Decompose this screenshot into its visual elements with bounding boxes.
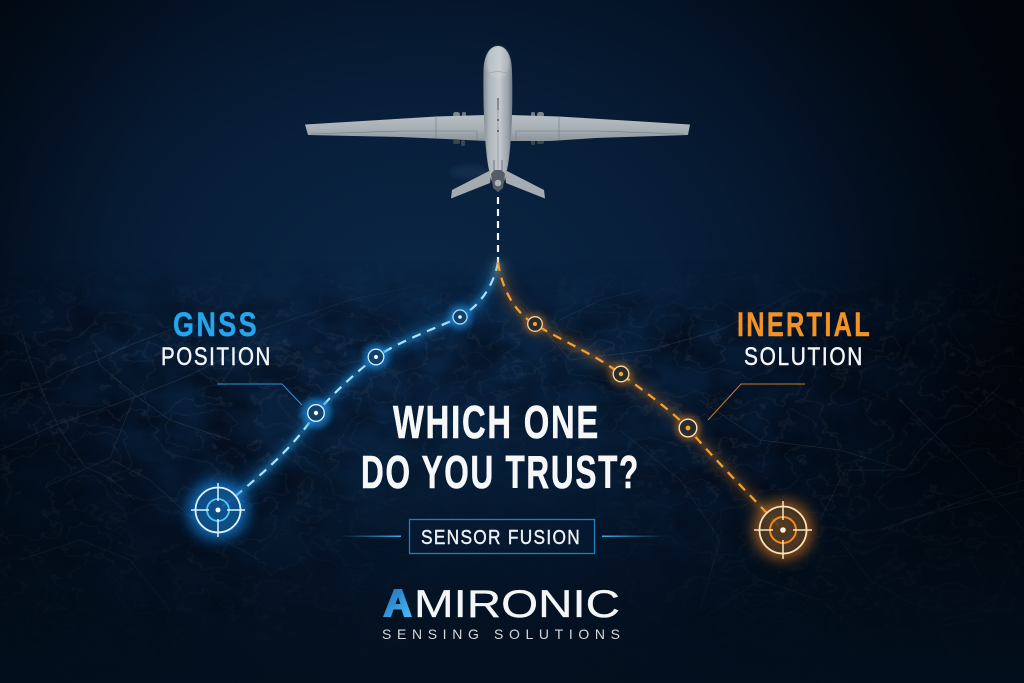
left wing — [305, 115, 486, 141]
title: WHICH ONE — [393, 396, 600, 448]
engine pods — [453, 112, 544, 146]
orange waypoint 2 — [609, 362, 633, 386]
label: SOLUTION: SOLUTION — [744, 343, 864, 371]
fuselage — [483, 46, 512, 192]
logo: Amironic: MIRONIC — [414, 583, 620, 626]
leader line: inertial — [708, 384, 805, 420]
right wing — [510, 115, 690, 141]
orange inertial path — [498, 262, 812, 559]
label: INERTIAL: INERTIAL — [737, 306, 872, 344]
title: DO YOU TRUST? — [361, 446, 640, 498]
spine — [497, 108, 499, 170]
left tail — [451, 171, 491, 198]
label: GNSS: GNSS — [173, 306, 259, 344]
label: POSITION: POSITION — [161, 343, 272, 371]
terrain map texture — [0, 280, 1024, 610]
logo: Amironic — [382, 583, 620, 642]
sensor fusion badge: SENSOR FUSION — [421, 527, 581, 549]
blue waypoint 3 — [301, 398, 331, 428]
sensor fusion badge — [340, 520, 665, 554]
right tail — [505, 171, 545, 198]
leader line: GNSS — [217, 384, 302, 405]
tail shadow glow — [450, 165, 490, 179]
logo: Amironic: SENSING SOLUTIONS — [382, 626, 620, 642]
logo mark A — [383, 589, 412, 617]
orange waypoint 1 — [524, 313, 546, 335]
orange target — [754, 501, 812, 559]
blue GNSS path — [188, 262, 498, 540]
nose highlight — [486, 46, 510, 78]
blue target — [188, 480, 248, 540]
blue waypoint 1 — [448, 305, 472, 329]
rear engine — [491, 170, 505, 192]
blue waypoint 2 — [363, 344, 389, 370]
drone aircraft — [305, 46, 690, 198]
title — [361, 396, 640, 498]
centre dashed line from drone — [497, 197, 499, 266]
orange waypoint 3 — [675, 415, 701, 441]
